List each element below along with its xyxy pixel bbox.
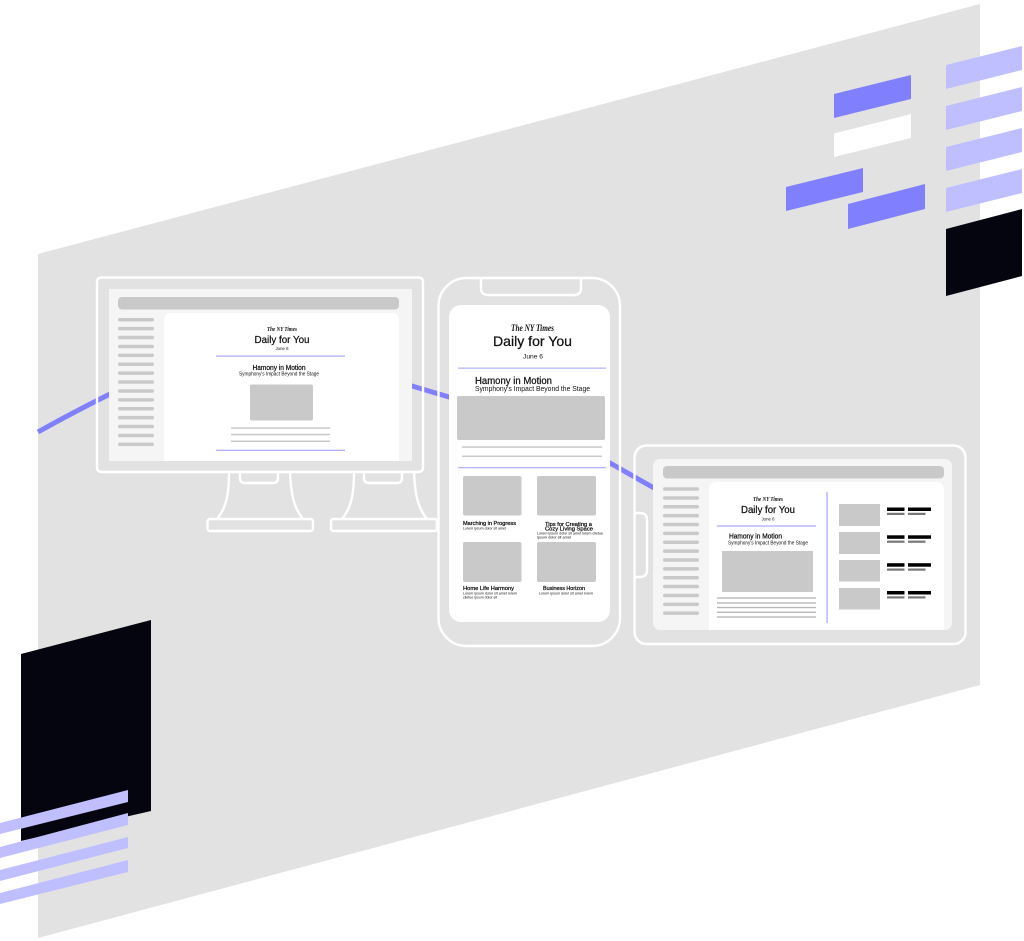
phone title: Daily for You	[493, 333, 572, 349]
tablet frame	[634, 446, 966, 644]
phone headline: Hamony in Motion	[475, 375, 552, 387]
tablet address bar	[663, 466, 944, 478]
tablet list item 1	[839, 504, 931, 526]
phone date: June 6	[523, 354, 544, 360]
tablet screen	[653, 459, 952, 630]
tablet headline: Hamony in Motion	[729, 534, 782, 540]
monitor subheadline: Symphony's Impact Beyond the Stage	[239, 372, 319, 378]
article: Marching in Progress: Lorem ipsum dolor sit amet	[463, 526, 506, 530]
monitor date: June 6	[276, 346, 289, 351]
tablet body lines	[717, 597, 816, 618]
monitor masthead: The NY Times	[267, 326, 297, 333]
article: Tips for Creating a Cozy Living Space: Tips for Creating a	[545, 522, 593, 528]
monitor screen	[109, 289, 412, 461]
article: Tips for Creating a Cozy Living Space	[537, 476, 603, 540]
tablet title: Daily for You	[741, 504, 795, 516]
phone hero image	[457, 396, 605, 440]
top-right decorative blocks	[786, 46, 1022, 296]
monitor sidebar	[118, 318, 154, 446]
article: Home Life Harmony: clietue ipsum dolor sit	[463, 596, 497, 600]
phone masthead: The NY Times	[511, 323, 554, 333]
monitor address bar	[118, 297, 399, 310]
article: Business Horizon	[537, 542, 596, 596]
article: Home Life Harmony	[463, 542, 522, 600]
article: Tips for Creating a Cozy Living Space: Cozy Living Space	[545, 526, 593, 532]
phone body lines	[462, 446, 602, 457]
phone frame	[438, 278, 620, 646]
article: Home Life Harmony: Home Life Harmony	[463, 586, 514, 592]
tablet subheadline: Symphony's Impact Beyond the Stage	[728, 540, 808, 546]
tablet sidebar	[663, 487, 699, 615]
monitor headline: Hamony in Motion	[252, 365, 306, 372]
tablet list item 4	[839, 588, 931, 610]
monitor title: Daily for You	[254, 334, 310, 346]
tablet date: June 6	[762, 516, 775, 522]
tablet list item 2	[839, 532, 931, 554]
phone screen	[449, 305, 610, 622]
connecting purple curve	[38, 368, 654, 488]
monitor body lines	[231, 427, 330, 442]
article: Marching in Progress: Marching in Progress	[463, 521, 516, 527]
article: Marching in Progress	[463, 476, 522, 530]
phone subheadline: Symphony's Impact Beyond the Stage	[475, 384, 590, 393]
tablet list item 3	[839, 560, 931, 582]
monitor image placeholder	[250, 384, 313, 420]
bottom-left decorative blocks	[0, 620, 151, 904]
monitor email card	[164, 313, 399, 461]
tablet hero image	[722, 551, 813, 592]
monitor frame and stands	[97, 278, 437, 531]
article: Business Horizon: Business Horizon	[543, 586, 585, 592]
article: Tips for Creating a Cozy Living Space: ipsum dolor sit amet	[537, 536, 571, 540]
tablet masthead: The NY Times	[753, 496, 783, 503]
article: Tips for Creating a Cozy Living Space: Lorem ipsum dolor sit amet lorem clietue	[537, 532, 603, 536]
article: Home Life Harmony: Lorem ipsum dolor sit amet lorem	[463, 592, 517, 596]
article: Business Horizon: Lorem ipsum dolor sit amet lorem	[539, 592, 593, 596]
tablet email card	[709, 482, 944, 630]
